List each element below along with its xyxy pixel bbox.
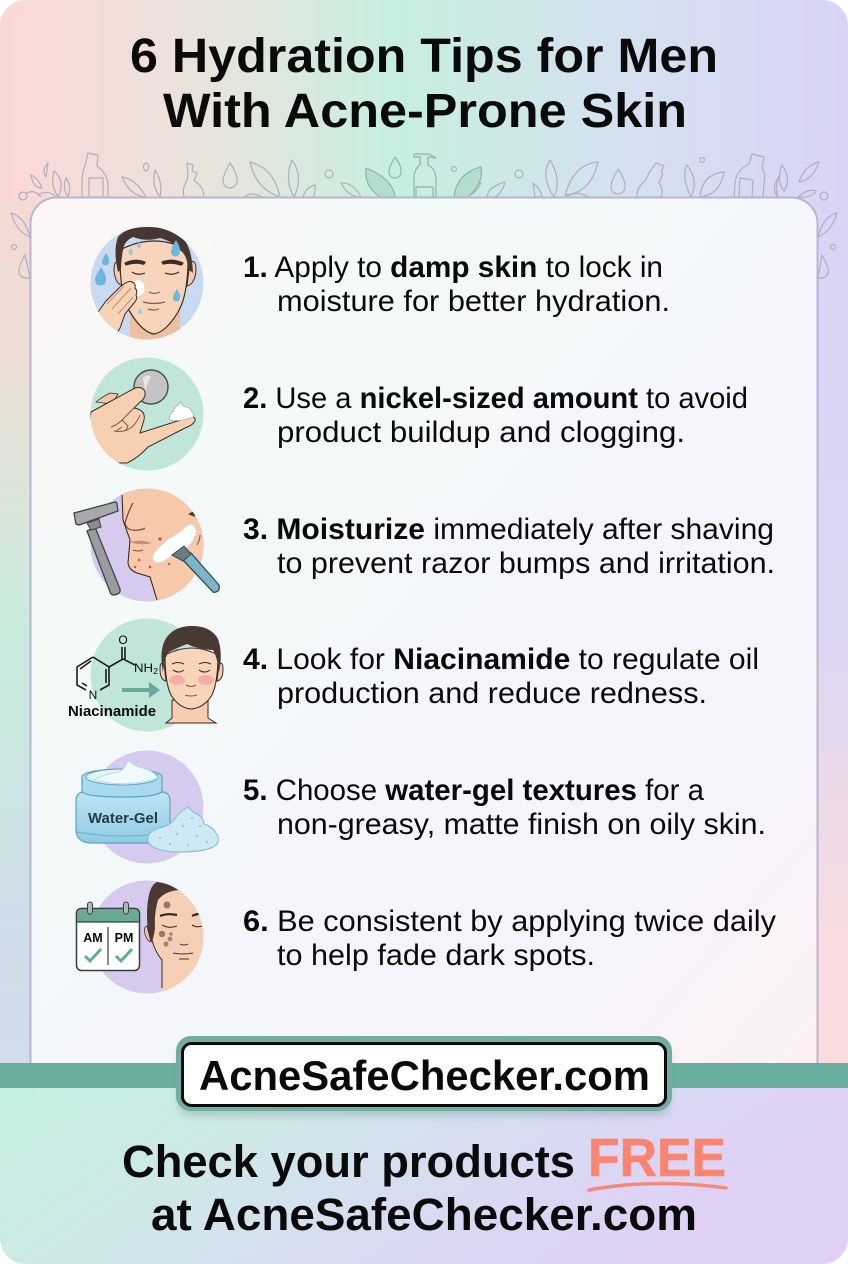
icon: nickel-sized amount on fingertip (85, 358, 204, 470)
tip 4 (243, 643, 759, 710)
icon: AM PM calendar and face with dark spots (76, 880, 210, 995)
title: With Acne-Prone Skin (163, 85, 687, 138)
icon: razor and brush on freshly shaved skin (74, 485, 219, 610)
url badge (176, 1036, 672, 1116)
title: 6 Hydration Tips for Men (130, 30, 718, 83)
icon: AM PM calendar and face with dark spots: PM (115, 931, 133, 945)
tip 1: moisture for better hydration. (277, 285, 670, 318)
tip 3: 3. Moisturize immediately after shaving (243, 513, 774, 546)
icon: niacinamide molecule and calm face: Niacinamide (68, 704, 156, 720)
title (130, 30, 718, 138)
tip 1 (243, 251, 670, 318)
icon: water-gel cream jar: Water-Gel (88, 811, 158, 827)
decorative botanical and bottle line art (11, 153, 837, 278)
icon: niacinamide molecule and calm face: N (89, 688, 97, 702)
free underline (589, 1183, 726, 1190)
icon: AM PM calendar and face with dark spots: AM (83, 931, 103, 945)
tip 6: to help fade dark spots. (277, 939, 595, 972)
tip 4: production and reduce redness. (277, 677, 707, 710)
panel: tips card (30, 198, 818, 1108)
tip 6: 6. Be consistent by applying twice daily (243, 905, 776, 938)
call to action: FREE (588, 1128, 726, 1188)
tip 6 (243, 905, 776, 972)
tip 5: non-greasy, matte finish on oily skin. (277, 808, 766, 841)
tip 2 (243, 382, 748, 449)
tip 2: product buildup and clogging. (277, 416, 685, 449)
tip 5: 5. Choose water-gel textures for a (243, 774, 705, 807)
tip 2: 2. Use a nickel-sized amount to avoid (243, 382, 748, 415)
tip 4: 4. Look for Niacinamide to regulate oil (243, 643, 759, 676)
icon: niacinamide molecule and calm face (68, 618, 223, 732)
icon: niacinamide molecule and calm face: 2 (153, 667, 159, 676)
icon: man applying moisturizer to damp skin (90, 226, 204, 345)
icon: niacinamide molecule and calm face: O (118, 633, 128, 647)
icon: niacinamide molecule and calm face: NH (134, 661, 151, 675)
tip 5 (243, 774, 766, 841)
tip 3 (243, 513, 775, 580)
call to action: Check your products (122, 1136, 575, 1187)
tip 1: 1. Apply to damp skin to lock in (243, 251, 663, 284)
call to action (122, 1128, 726, 1240)
tip 3: to prevent razor bumps and irritation. (277, 547, 775, 580)
footer background (0, 1063, 848, 1264)
url badge: AcneSafeChecker.com (199, 1052, 650, 1099)
call to action: at AcneSafeChecker.com (151, 1189, 697, 1240)
icon: water-gel cream jar (76, 750, 218, 864)
